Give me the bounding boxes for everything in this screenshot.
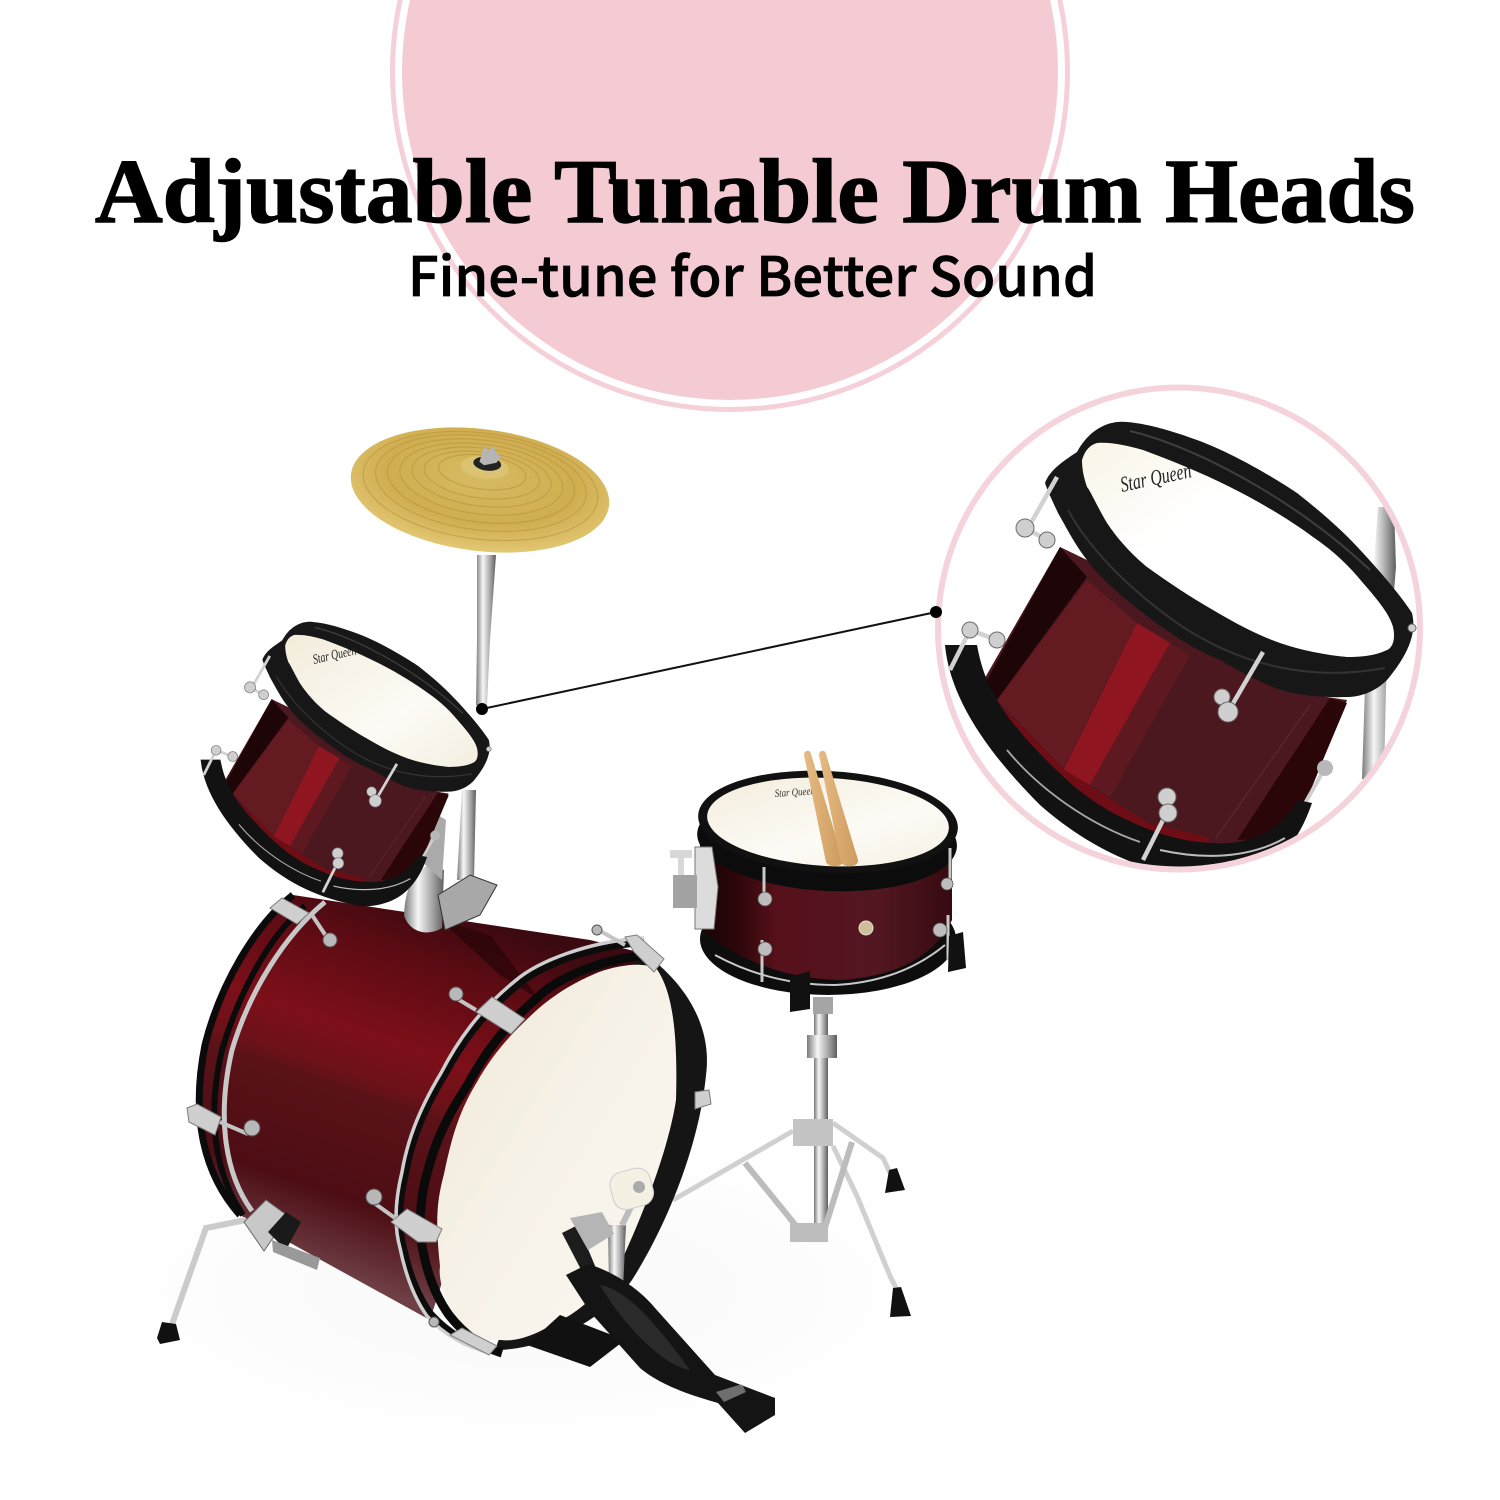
pedal post bbox=[608, 1225, 626, 1290]
snare lugs bbox=[762, 848, 950, 982]
tom head bbox=[285, 635, 478, 767]
title: Adjustable Tunable Drum Heads bbox=[95, 141, 1415, 242]
drum sticks bbox=[804, 751, 858, 866]
bass spur leg bbox=[157, 1200, 320, 1344]
snare shell bbox=[700, 845, 952, 980]
snare brackets bbox=[948, 932, 966, 972]
inset drum bbox=[945, 422, 1416, 883]
inset circle border bbox=[938, 388, 1420, 870]
tom mount and lower pole bbox=[404, 790, 497, 932]
bass front head bbox=[437, 965, 676, 1340]
zoom inset: tuning detail bbox=[938, 388, 1420, 883]
tom drum bbox=[201, 622, 491, 906]
bass front rim crescent bbox=[495, 950, 707, 1350]
tom body bbox=[201, 622, 491, 906]
pedal board bbox=[566, 1264, 775, 1433]
bass back hoops bbox=[199, 895, 325, 1215]
bass pedal bbox=[527, 1165, 775, 1433]
snare air vent bbox=[859, 921, 873, 935]
inset logo: Star Queen bbox=[1118, 457, 1193, 497]
callout line bbox=[476, 606, 942, 715]
snare throw-off bbox=[670, 847, 718, 929]
beater bbox=[607, 1165, 656, 1212]
bass front hoops bbox=[396, 938, 651, 1353]
snare bottom hoop bbox=[700, 883, 956, 995]
bass shell bbox=[199, 895, 650, 1320]
subtitle: Fine-tune for Better Sound bbox=[408, 233, 1097, 312]
bass drum bbox=[187, 895, 711, 1355]
cymbal bbox=[344, 414, 616, 566]
inset stand pole bbox=[1362, 507, 1396, 779]
floor shadow bbox=[50, 1120, 990, 1460]
bass clamps bbox=[187, 898, 711, 1355]
bass reflection of mount bbox=[440, 920, 540, 1000]
pink header circle bbox=[392, 0, 1068, 410]
pedal base plate bbox=[527, 1315, 625, 1367]
snare drum bbox=[670, 751, 966, 1012]
tom logo: Star Queen bbox=[312, 643, 358, 668]
snare top hoop and head bbox=[695, 764, 960, 898]
cymbal stand upper pole bbox=[476, 555, 496, 705]
inset head bbox=[1082, 443, 1394, 657]
snare logo: Star Queen bbox=[774, 785, 816, 800]
snare stand bbox=[673, 997, 911, 1317]
bass lug bolts bbox=[220, 915, 625, 1218]
